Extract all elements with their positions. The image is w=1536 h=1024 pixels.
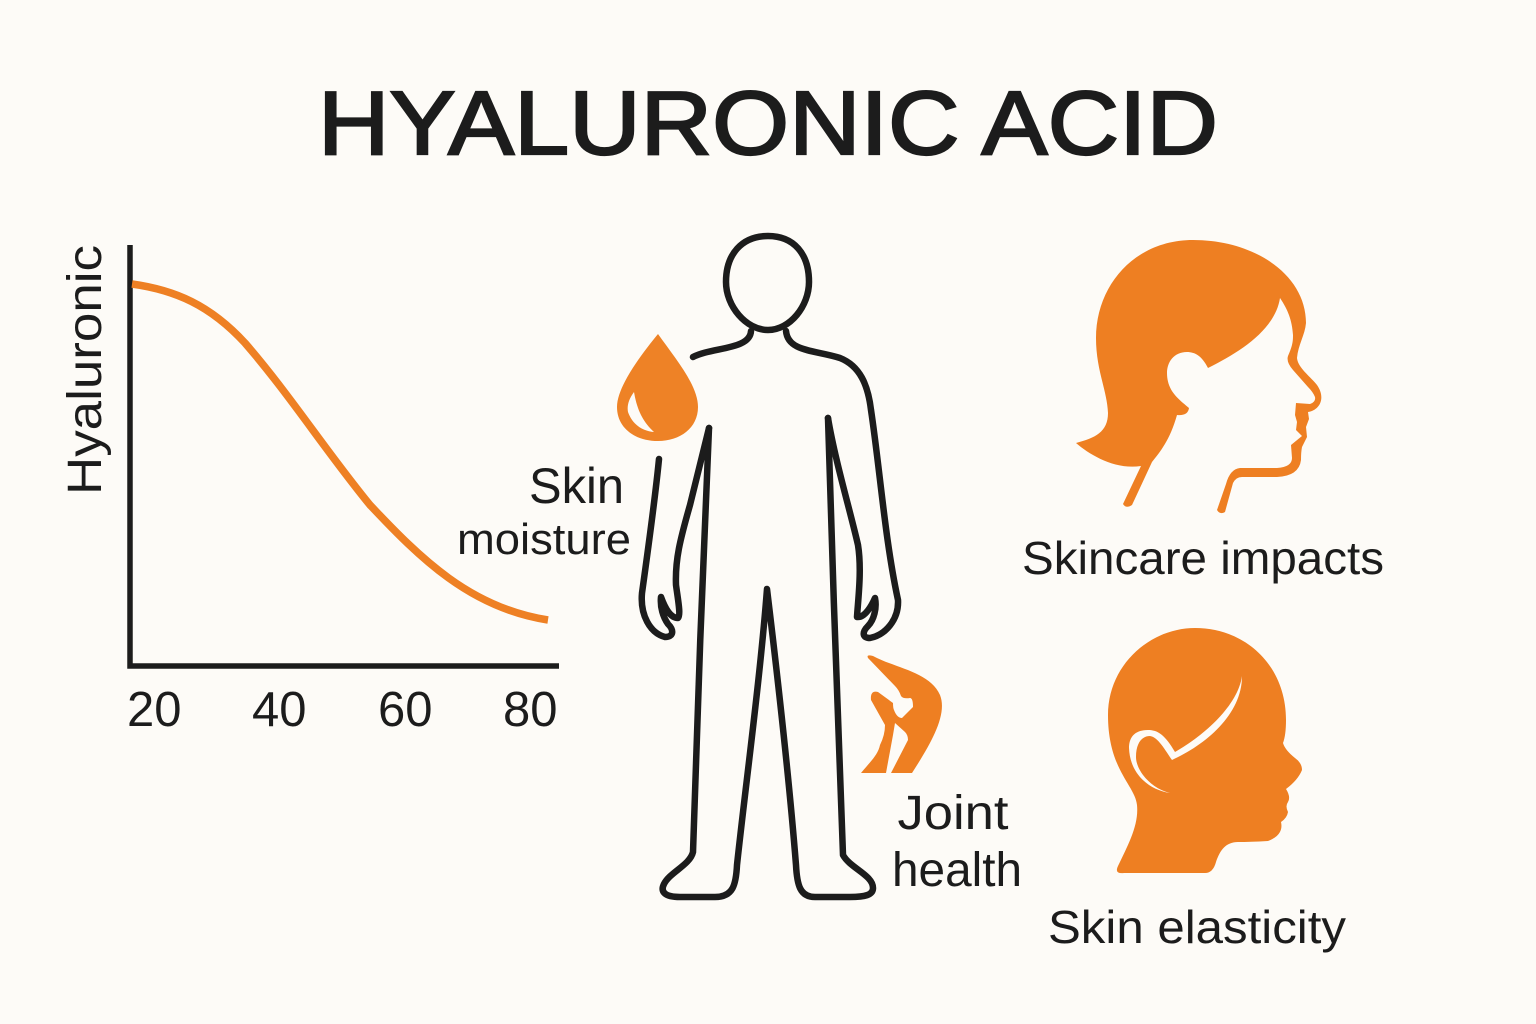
- label: joint health: [892, 787, 1022, 897]
- label: joint health: health: [892, 844, 1022, 897]
- legs and feet: [663, 418, 873, 897]
- title: HYALURONIC ACID: [318, 74, 1218, 174]
- label: skincare impacts: Skincare impacts: [1022, 532, 1384, 584]
- chart curve: [132, 284, 548, 620]
- head: [726, 236, 809, 330]
- icon: head profile with ear: [1108, 628, 1302, 873]
- human body outline: [642, 236, 898, 897]
- line chart: hyaluronic level by age: [59, 245, 559, 737]
- label: skin moisture: Skin: [529, 458, 624, 514]
- icon: knee joint: [861, 655, 942, 773]
- chart axes: [130, 245, 559, 666]
- icon: water drop: [617, 334, 698, 441]
- x axis labels: 40: [252, 683, 307, 737]
- x axis labels: 20: [127, 683, 182, 737]
- y axis label: Hyaluronic: [59, 245, 112, 495]
- x axis labels: [127, 683, 558, 737]
- label: skin moisture: [457, 458, 631, 564]
- x axis labels: 60: [378, 683, 433, 737]
- left arm and hand: [642, 428, 709, 637]
- icon: woman's head profile: [1076, 240, 1321, 513]
- label: joint health: Joint: [898, 787, 1008, 840]
- label: skin moisture: moisture: [457, 515, 631, 564]
- neck and left shoulder: [693, 331, 751, 357]
- label: skin elasticity: Skin elasticity: [1048, 901, 1346, 953]
- right shoulder, arm and hand: [786, 331, 898, 638]
- x axis labels: 80: [503, 683, 558, 737]
